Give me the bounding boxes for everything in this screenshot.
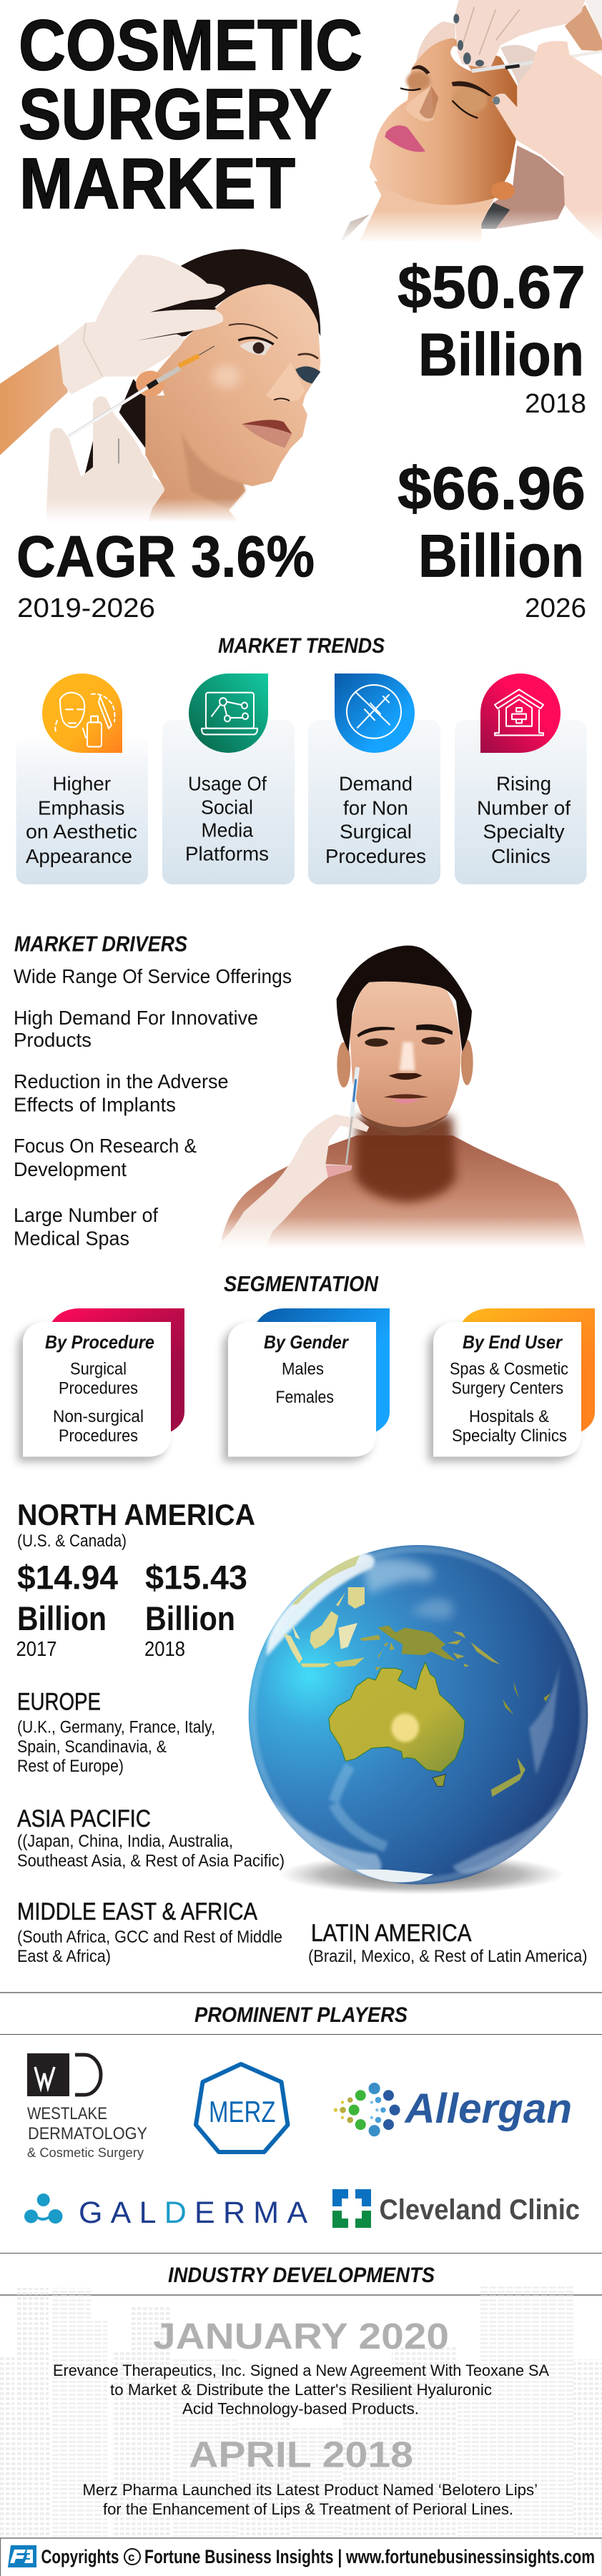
logo: fortune business insights [8,2545,36,2567]
icon: face and bottle [42,673,122,753]
panel: by procedure: Surgical [70,1360,127,1379]
development: january 2020: JANUARY 2020 [153,2316,449,2357]
panel: by end user: Surgery Centers [452,1378,563,1398]
panel: trend rising number of specialty clinics: Rising [496,773,551,795]
list: market drivers: High Demand For Innovative [14,1007,258,1029]
development: january 2020: to Market & Distribute the Latter's Resilient Hyaluronic [110,2381,492,2399]
panel: trend higher emphasis on aesthetic appearance: Emphasis [38,796,124,819]
title [19,6,362,224]
region: asia pacific: Southeast Asia, & Rest of Asia Pacific) [17,1852,285,1870]
icon: clinic building [480,673,561,753]
region: north america [16,1498,255,1661]
panel: trend demand for non surgical procedures [308,673,440,884]
statistic: north america 2018 [144,1559,247,1661]
region: middle east and africa: East & Africa) [17,1947,111,1966]
region: middle east and africa: (South Africa, GCC and Rest of Middle [17,1928,282,1947]
development: january 2020: Erevance Therapeutics, Inc. Signed a New Agreement With Teoxane SA [53,2362,549,2379]
background: city skyline [0,2284,602,2538]
photo: man receiving injection [214,945,593,1249]
list: market drivers: Development [14,1158,127,1180]
panel: trend rising number of specialty clinics: Specialty [483,821,565,843]
statistic: north america 2017: 2017 [16,1638,57,1661]
logo: merz: MERZ [209,2095,276,2128]
photo: woman receiving syringe at temple [0,249,320,523]
panel: trend higher emphasis on aesthetic appearance: on Aesthetic [26,821,137,843]
development: april 2018: APRIL 2018 [189,2434,413,2475]
region: latin america: LATIN AMERICA [311,1920,472,1947]
icon: copyright symbol: c [128,2550,134,2564]
statistic: north america 2017: $14.94 [17,1559,118,1596]
panel: trend rising number of specialty clinics [455,673,586,884]
region: europe: (U.K., Germany, France, Italy, [17,1717,215,1737]
title: COSMETIC [19,6,362,86]
panel: trend usage of social media: Social [201,796,253,818]
panel: by procedure: By Procedure [45,1331,154,1353]
icon: crossed syringe [335,673,415,753]
region: europe: Rest of Europe) [17,1757,124,1776]
panel: by gender: By Gender [264,1331,350,1353]
logo: cleveland clinic: Cleveland Clinic [379,2194,580,2226]
title: SURGERY [19,74,332,154]
heading: prominent players: PROMINENT PLAYERS [194,2003,408,2027]
title: MARKET [19,144,295,224]
logo: merz [196,2064,287,2152]
statistic: north america 2018: $15.43 [145,1559,247,1596]
development: april 2018: for the Enhancement of Lips & Treatment of Perioral Lines. [103,2500,513,2518]
region: middle east and africa [17,1898,282,1966]
panel: by end user: Spas & Cosmetic [450,1360,568,1379]
market size 2026: 2026 [525,593,586,623]
list: market drivers: Products [14,1029,92,1051]
list: market drivers: Effects of Implants [14,1094,176,1115]
list: market drivers: Focus On Research & [14,1135,197,1157]
CAGR: CAGR 3.6% [16,525,315,589]
region: north america: (U.S. & Canada) [17,1531,127,1551]
panel: trend demand for non surgical procedures: Surgical [340,821,412,843]
statistic: north america 2017 [16,1559,118,1661]
panel: trend higher emphasis on aesthetic appearance [16,673,148,884]
region: asia pacific: ((Japan, China, India, Australia, [17,1832,233,1851]
panel: by procedure: Procedures [59,1378,138,1398]
logo: allergan [334,2083,572,2136]
region: latin america [308,1920,588,1966]
logo: westlake dermatology: WESTLAKE [27,2104,107,2123]
market size 2018: $50.67 [398,253,586,320]
heading: industry developments: INDUSTRY DEVELOPMENTS [168,2264,435,2287]
logo: westlake dermatology: & Cosmetic Surgery [27,2146,144,2160]
footer: Copyrights [41,2546,119,2567]
footer [0,2538,602,2576]
market size 2018: 2018 [525,389,586,419]
region: asia pacific: ASIA PACIFIC [17,1805,151,1832]
heading: market drivers: MARKET DRIVERS [14,932,187,957]
panel: trend demand for non surgical procedures: Demand [339,773,413,795]
panel: by gender: Males [282,1360,324,1379]
panel: by end user: By End User [463,1331,563,1353]
panel: by procedure: Procedures [59,1426,138,1446]
panel: by procedure: Non-surgical [53,1407,144,1426]
heading: market trends: MARKET TRENDS [218,634,385,658]
logo: cleveland clinic [332,2189,580,2228]
list: market drivers: Large Number of [14,1204,158,1226]
market size 2018: Billion [418,321,584,388]
panel: trend usage of social media: Platforms [185,843,269,865]
panel: trend higher emphasis on aesthetic appearance: Higher [53,773,111,795]
development: january 2020 [53,2316,549,2418]
panel: trend usage of social media [162,673,295,884]
development: january 2020: Acid Technology-based Products. [182,2399,419,2418]
region: europe [17,1689,215,1776]
region: europe: EUROPE [17,1689,101,1716]
panel: trend usage of social media: Media [202,819,253,841]
list: market drivers: Medical Spas [14,1228,129,1250]
market size 2018 [398,253,586,419]
panel: trend usage of social media: Usage Of [188,773,267,795]
panel: by end user: Hospitals & [469,1407,549,1426]
list: market drivers: Reduction in the Adverse [14,1070,229,1092]
logo: galderma: GAL D ERMA [79,2196,307,2230]
panel: by gender: Females [276,1388,334,1407]
list: market drivers [14,965,292,1250]
panel: trend demand for non surgical procedures: Procedures [325,845,426,867]
statistic: north america 2017: Billion [17,1599,107,1637]
statistic: north america 2018: Billion [145,1599,235,1637]
logo: westlake dermatology: DERMATOLOGY [28,2124,147,2143]
panel: by procedure [23,1308,184,1457]
region: north america: NORTH AMERICA [17,1498,255,1531]
market size 2026 [398,455,586,623]
statistic: north america 2018: 2018 [144,1638,185,1661]
icon: copyright symbol [124,2549,140,2565]
CAGR [16,525,315,623]
photo: woman lying with injection to forehead [329,0,602,244]
logo: westlake dermatology [27,2053,147,2160]
market size 2026: $66.96 [398,455,586,522]
region: asia pacific [17,1805,285,1870]
CAGR: 2019-2026 [17,593,155,623]
panel: by gender [228,1308,390,1457]
icon: laptop network [189,673,268,753]
heading: segmentation: SEGMENTATION [224,1271,379,1296]
illustration: globe [249,1545,588,1895]
region: europe: Spain, Scandinavia, & [17,1737,167,1757]
panel: trend rising number of specialty clinics: Clinics [491,845,551,867]
development: april 2018: Merz Pharma Launched its Latest Product Named ‘Belotero Lips’ [83,2481,538,2499]
panel: trend rising number of specialty clinics: Number of [477,796,571,819]
region: middle east and africa: MIDDLE EAST & AFRICA [17,1898,257,1925]
logo: allergan: Allergan [403,2086,572,2132]
development: april 2018 [83,2434,538,2518]
panel: by end user: Specialty Clinics [452,1426,567,1446]
list: market drivers: Wide Range Of Service Offerings [14,965,292,987]
panel: trend higher emphasis on aesthetic appearance: Appearance [26,845,132,867]
panel: trend demand for non surgical procedures: for Non [343,796,408,819]
market size 2026: Billion [418,522,584,589]
panel: by end user [433,1308,595,1457]
